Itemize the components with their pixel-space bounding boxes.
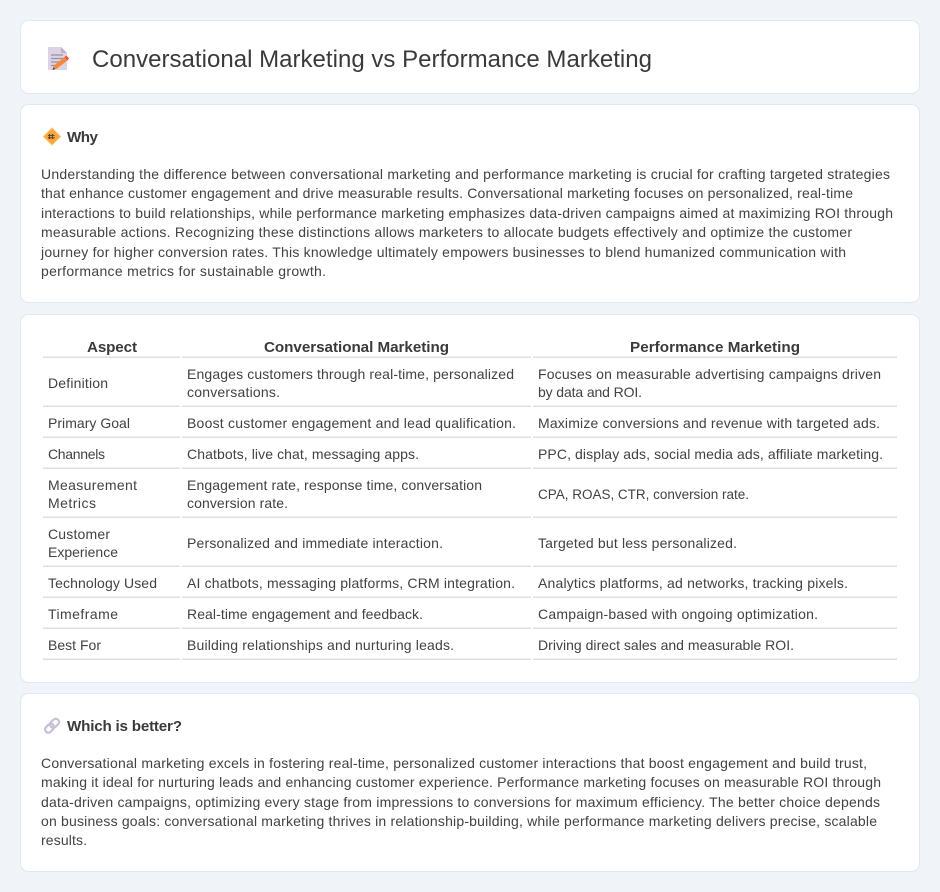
row: timeframe: Real-time engagement and feedback. [187,606,423,622]
row: timeframe [43,606,897,629]
icon: document with pencil [48,47,69,70]
row: definition: conversations. [187,384,280,400]
row: timeframe: Campaign-based with ongoing optimization. [538,606,818,622]
row: definition: Definition [48,375,108,391]
row: customer experience: Targeted but less personalized. [538,535,737,551]
icon: warning diamond [44,128,60,145]
row: definition: Engages customers through real-time, personalized [187,366,514,382]
icon: chain link [44,717,60,734]
text block: why paragraph: interactions to build relationships, while performance marketing emphasizes data-driven campaigns aimed at maximizing ROI through [41,205,893,221]
row: timeframe: Timeframe [48,606,118,622]
text block: why paragraph: journey for higher conversion rates. This knowledge ultimately empowers businesses to blend humanized communication with [40,244,846,260]
row: definition: by data and ROI. [538,384,642,400]
row: best for: Best For [48,637,101,653]
text block: why paragraph: that enhance customer engagement and drive measurable results. Conversational marketing focuses on personalized, real-time [41,185,853,201]
panel: comparison table [20,314,920,682]
text block: why paragraph: performance metrics for sustainable growth. [41,263,326,279]
panel: which is better [20,694,920,872]
row: technology used: Technology Used [48,575,157,591]
row: channels [43,446,897,469]
table header row [43,339,897,358]
row: measurement metrics: conversion rate. [187,495,288,511]
row: definition: Focuses on measurable advertising campaigns driven [538,366,881,382]
table header row: Aspect [87,339,137,356]
text block: which is better paragraph [41,755,881,848]
row: best for: Building relationships and nurturing leads. [187,637,454,653]
row: primary goal: Primary Goal [48,415,130,431]
heading: which is better: Which is better? [67,718,182,735]
row: primary goal: Boost customer engagement and lead qualification. [187,415,516,431]
row: customer experience: Customer [48,526,110,542]
panel: why [20,104,920,302]
row: best for [43,637,897,660]
row: measurement metrics: CPA, ROAS, CTR, conversion rate. [538,487,749,502]
row: measurement metrics: Metrics [48,495,96,511]
text block: which is better paragraph: data-driven campaigns, optimizing every stage from impressions to conversions for maximum efficiency. The better choice depends [41,794,880,810]
panel: title card [20,20,920,94]
row: measurement metrics [43,477,897,518]
row: measurement metrics: Measurement [48,477,137,493]
row: customer experience: Experience [48,544,118,560]
text block: which is better paragraph: on business goals: conversational marketing thrives in relationship-building, while performance marketing delivers precise, scalable [41,813,877,829]
text block: why paragraph [40,166,893,279]
row: channels: Channels [48,446,105,462]
table header row: Conversational Marketing [264,339,449,356]
heading: why: Why [67,129,99,146]
text block: which is better paragraph: results. [41,832,87,848]
row: technology used: AI chatbots, messaging platforms, CRM integration. [187,575,515,591]
text block: which is better paragraph: Conversational marketing excels in fostering real-time, personalized customer interactions that boost engagement and build trust, [41,755,867,771]
row: technology used [43,575,897,598]
row: technology used: Analytics platforms, ad networks, tracking pixels. [538,575,848,591]
row: channels: PPC, display ads, social media ads, affiliate marketing. [538,446,883,462]
table header row: Performance Marketing [630,339,800,356]
text block: why paragraph: Understanding the difference between conversational marketing and performance marketing is crucial for crafting targeted strategies [41,166,890,182]
text block: which is better paragraph: making it ideal for nurturing leads and enhancing customer experience. Performance marketing focuses on measurable ROI through [41,774,881,790]
text block: why paragraph: measurable actions. Recognizing these distinctions allows marketers to allocate budgets effectively and optimize the customer [41,224,852,240]
row: best for: Driving direct sales and measurable ROI. [538,637,794,653]
title: Conversational Marketing vs Performance Marketing [92,46,652,73]
row: customer experience: Personalized and immediate interaction. [187,535,443,551]
row: primary goal: Maximize conversions and revenue with targeted ads. [538,415,880,431]
row: customer experience [43,526,897,567]
row: measurement metrics: Engagement rate, response time, conversation [187,477,482,493]
row: primary goal [43,415,897,438]
row: channels: Chatbots, live chat, messaging apps. [187,446,419,462]
row: definition [43,366,897,407]
